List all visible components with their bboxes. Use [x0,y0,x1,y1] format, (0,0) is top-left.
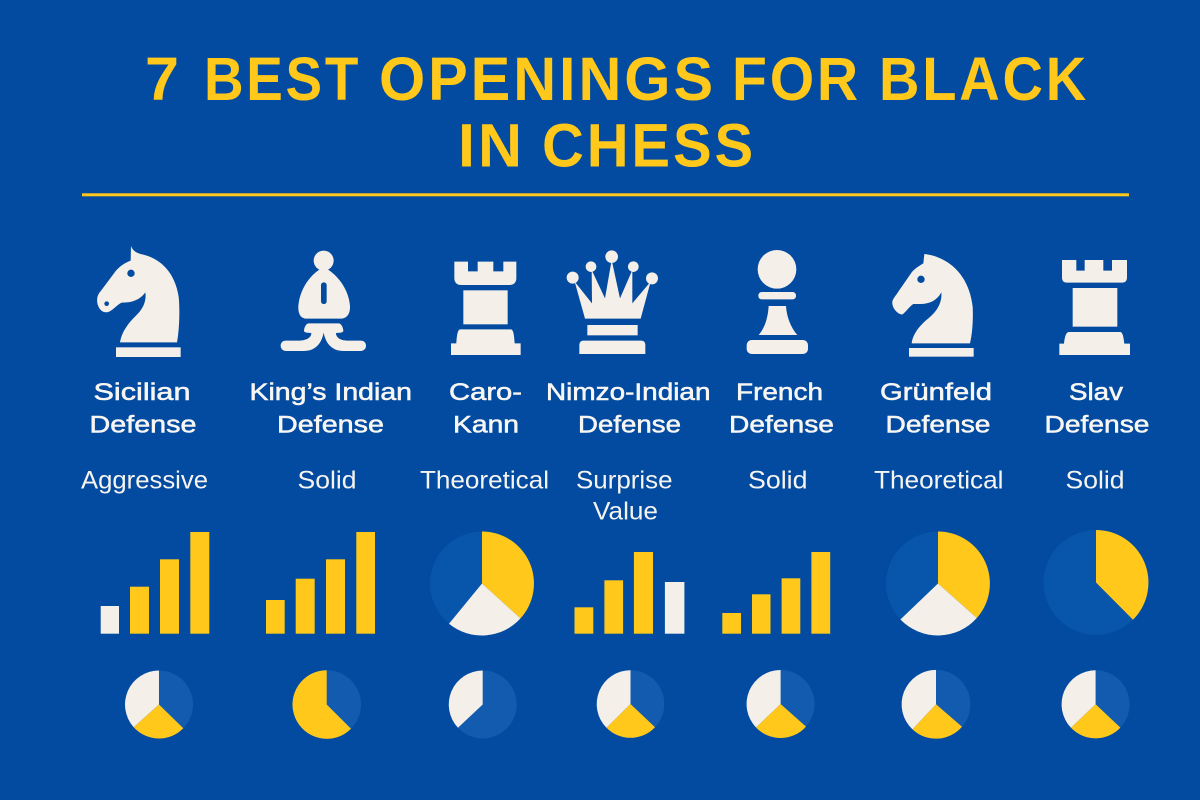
title [145,45,1089,180]
style: Solid: Solid [298,467,356,495]
column: Nimzo-Indian Defense [546,250,710,738]
name: Nimzo-Indian Defense: Defense [578,411,681,438]
column: Caro-Kann [420,262,549,738]
name: King's Indian Defense: King’s Indian [250,379,412,406]
title: OPENINGS [379,45,716,113]
icon: rook [1059,260,1130,355]
style: Theoretical: Theoretical [874,467,1004,495]
name: Caro-Kann: Kann [453,411,519,438]
column: Slav Defense [1044,260,1150,738]
style: Aggressive: Aggressive [81,467,208,495]
title: FOR [732,45,861,113]
name: French Defense: French [736,379,823,406]
icon: queen [567,250,658,354]
pie chart [902,670,970,739]
name: French Defense: Defense [729,411,834,438]
name: Sicilian Defense: Sicilian [94,379,190,406]
bar chart [266,532,375,634]
pie chart [747,670,815,738]
name: Grünfeld Defense: Grünfeld [880,379,992,406]
pie chart: large [1044,530,1148,635]
title: 7 [145,45,182,113]
name: Slav Defense: Slav [1069,379,1124,406]
bar chart [574,552,684,634]
name: Nimzo-Indian Defense: Nimzo-Indian [546,379,710,406]
name: Sicilian Defense: Defense [90,411,196,438]
style: Surprise Value: Value [593,497,658,525]
name: King's Indian Defense [250,379,412,438]
style: Theoretical: Theoretical [420,467,549,495]
name: King's Indian Defense: Defense [277,411,384,438]
name: Grünfeld Defense [880,379,992,438]
pie chart [125,670,193,739]
title: BLACK [879,45,1089,113]
icon: rook [451,262,521,355]
pie chart: large [430,532,534,636]
pie chart [292,670,361,739]
name: French Defense [729,379,834,438]
column: French Defense [722,250,834,738]
name: Caro-Kann: Caro- [449,379,522,406]
icon: knight [892,254,974,357]
name: Nimzo-Indian Defense [546,379,710,438]
column: Sicilian Defense [81,246,209,739]
name: Sicilian Defense [90,379,196,438]
style: Solid: Solid [748,467,808,495]
style: Surprise Value: Surprise [576,467,672,495]
name: Slav Defense [1044,379,1150,438]
name: Slav Defense: Defense [1044,411,1150,438]
pie chart [597,670,664,738]
title: CHESS [542,112,756,180]
column: Grünfeld Defense [874,254,1004,739]
column: King's Indian Defense [250,251,412,739]
style: Solid: Solid [1066,467,1124,495]
pie chart [1062,670,1130,738]
icon: knight [97,246,181,357]
title: IN [458,112,525,180]
bar chart [101,532,209,634]
name: Caro-Kann [449,379,522,438]
style: Surprise Value [576,467,672,525]
title: BEST [204,45,361,113]
bar chart [722,552,830,634]
icon: pawn [747,250,808,354]
icon: bishop [281,251,366,351]
name: Grünfeld Defense: Defense [886,411,990,438]
pie chart [449,670,517,738]
pie chart: large [886,532,990,636]
